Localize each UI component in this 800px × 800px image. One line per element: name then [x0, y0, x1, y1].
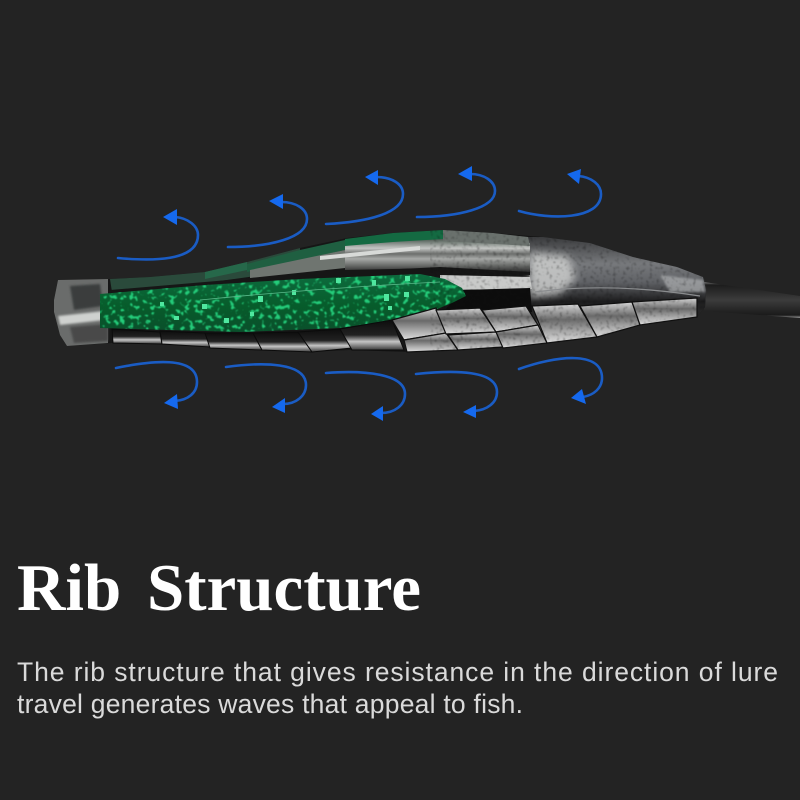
head section: [528, 237, 706, 344]
nose highlight: [660, 275, 705, 292]
description: travel generates waves that appeal to fish.: [17, 689, 523, 719]
lower rib segments: dark: [112, 320, 404, 352]
arrow 2: [228, 194, 307, 247]
dark shadow at core end: [440, 288, 532, 316]
gritty texture overlay: [430, 225, 710, 355]
arrow 4: [417, 166, 495, 217]
faint rib lines: [200, 282, 700, 300]
upper wave arrows: [118, 166, 601, 259]
tip of lure: [54, 279, 108, 346]
arrow 9: [416, 372, 497, 418]
arrow 10: [519, 358, 602, 404]
arrow 5: [519, 169, 601, 216]
arrow 3: [326, 170, 403, 224]
lure body: [54, 230, 706, 352]
arrow 7: [226, 364, 306, 413]
arrow 6: [116, 362, 197, 409]
upper rib band: [110, 230, 532, 293]
line: tail: [704, 282, 800, 318]
lure: [54, 225, 800, 355]
lower rib segments: silver: [392, 298, 697, 352]
title: Rib Structure: [17, 551, 421, 625]
arrow 1: [118, 209, 198, 259]
arrow 8: [326, 372, 405, 421]
lower wave arrows: [116, 358, 602, 421]
head highlight: [530, 252, 576, 298]
green glitter core: [100, 274, 466, 332]
description: The rib structure that gives resistance in the direction of lure: [17, 657, 778, 687]
description: [17, 657, 778, 719]
